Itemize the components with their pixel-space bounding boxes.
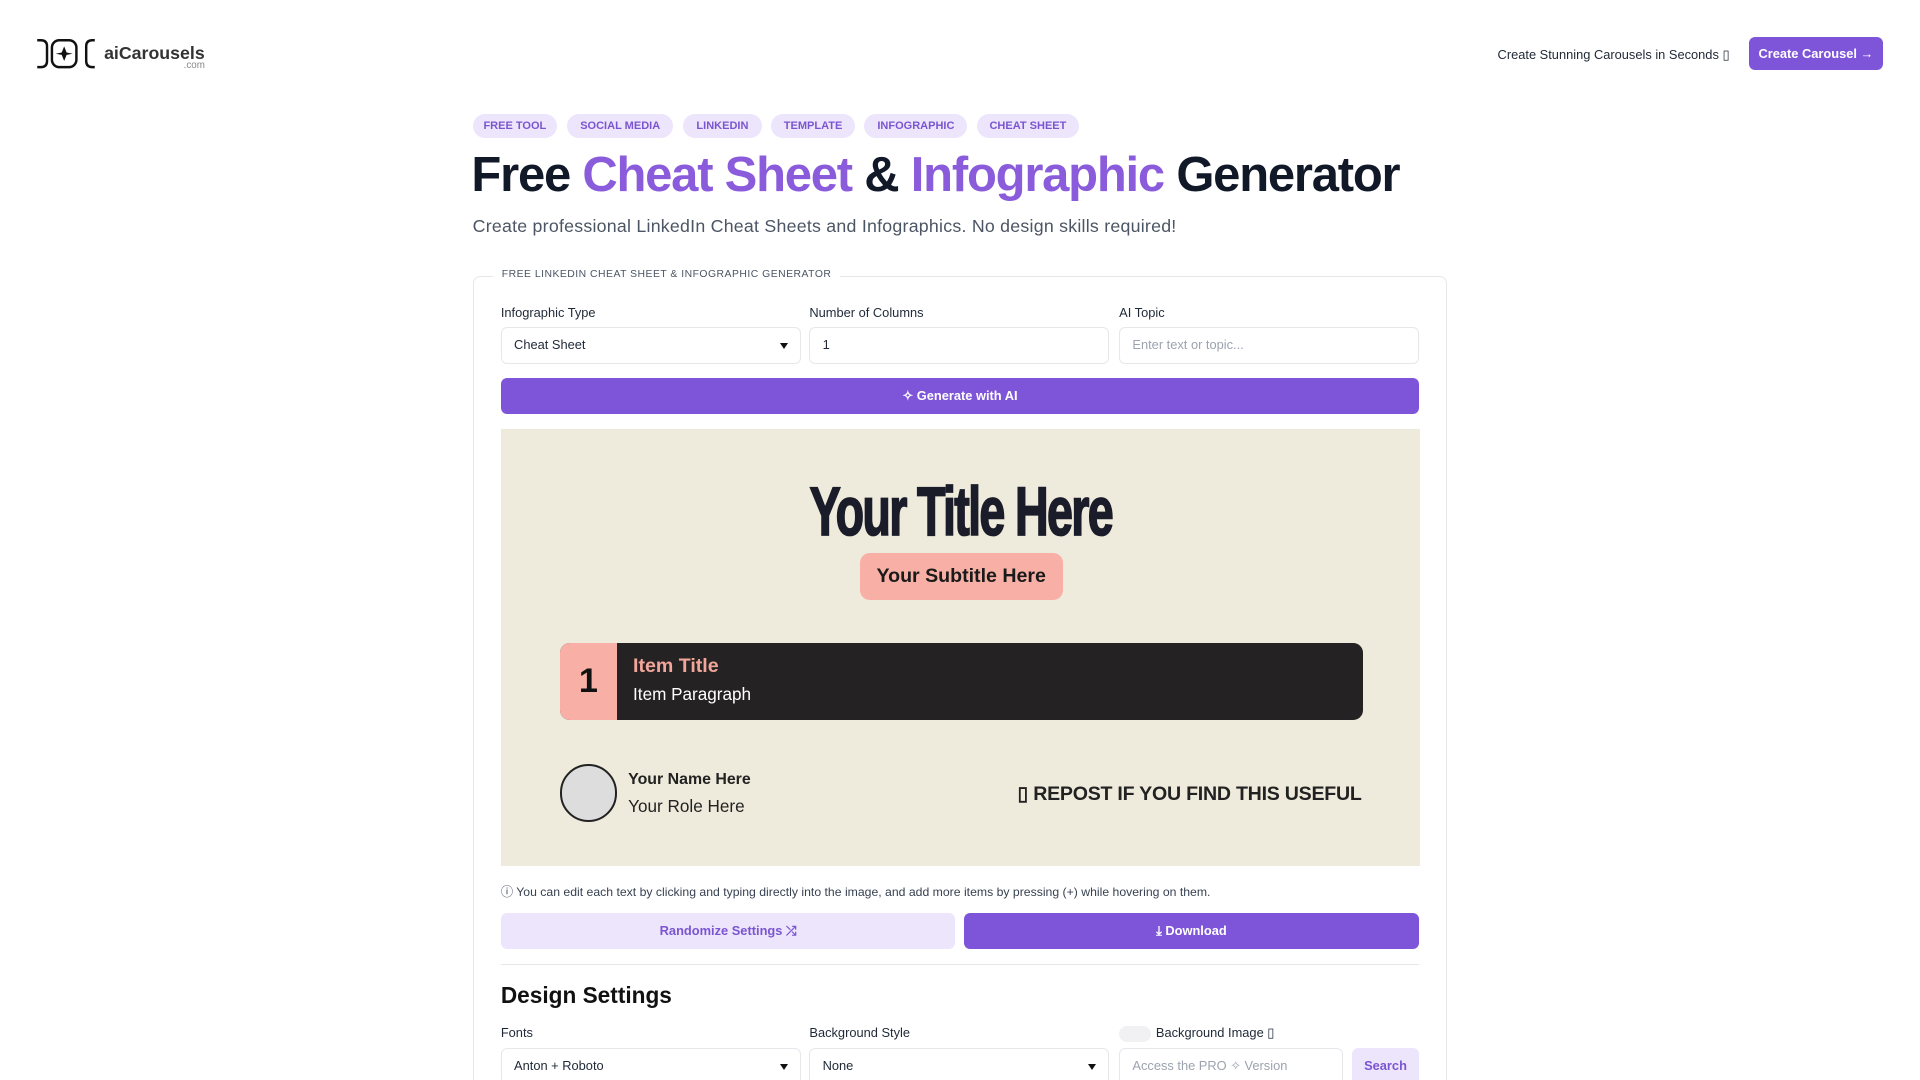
item row: Item Paragraph <box>633 684 751 704</box>
preview subtitle: Your Subtitle Here <box>877 565 1046 587</box>
design settings row: Background Image ▯ <box>1156 1025 1274 1040</box>
tags <box>473 114 1079 138</box>
design settings row <box>501 1025 1419 1080</box>
tags: INFOGRAPHIC <box>877 120 954 132</box>
info note: ⓘ You can edit each text by clicking and typing directly into the image, and add more items by pressing (+) while hovering on them. <box>501 885 1210 899</box>
form row: Cheat Sheet <box>514 337 585 352</box>
form row: Enter text or topic... <box>1132 337 1244 352</box>
tags: FREE TOOL <box>483 120 546 132</box>
repost callout: ▯ REPOST IF YOU FIND THIS USEFUL <box>1017 783 1362 805</box>
tags: TEMPLATE <box>784 120 842 132</box>
title: Free Cheat Sheet & Infographic Generator <box>471 148 1399 202</box>
download button <box>964 913 1419 949</box>
randomize button: Randomize Settings ⤮ <box>660 923 796 938</box>
tags: LINKEDIN <box>696 120 748 132</box>
design settings row: Background Style <box>809 1025 910 1040</box>
logo <box>37 39 205 71</box>
form row: 1 <box>823 337 830 352</box>
item row: 1 <box>579 662 598 700</box>
canvas: infographic preview <box>501 429 1420 866</box>
subtitle: Create professional LinkedIn Cheat Sheets and Infographics. No design skills required! <box>473 216 1176 236</box>
download button: ⤓ Download <box>1156 923 1227 938</box>
author: Your Name Here <box>628 771 751 788</box>
nav text: Create Stunning Carousels in Seconds ▯ <box>1498 47 1730 62</box>
author: Your Role Here <box>628 796 745 816</box>
tags: SOCIAL MEDIA <box>580 120 660 132</box>
item row: Item Title <box>633 655 719 677</box>
legend: FREE LINKEDIN CHEAT SHEET & INFOGRAPHIC GENERATOR <box>502 269 831 280</box>
nav button: Create Carousel → <box>1758 46 1873 61</box>
preview title: Your Title Here <box>809 473 1112 550</box>
design settings row: Search <box>1364 1058 1407 1073</box>
design settings row: Anton + Roboto <box>514 1058 604 1073</box>
randomize button <box>501 913 955 949</box>
form row: Number of Columns <box>809 305 924 320</box>
generate button: ✧ Generate with AI <box>902 388 1018 403</box>
design settings row: None <box>823 1058 853 1073</box>
preview subtitle <box>860 553 1063 600</box>
generate button <box>501 378 1419 414</box>
form row: AI Topic <box>1119 305 1165 320</box>
design settings row: Fonts <box>501 1025 533 1040</box>
logo: .com <box>184 60 205 71</box>
logo: aiCarousels <box>104 43 205 63</box>
nav button <box>1749 37 1883 70</box>
author <box>560 764 751 822</box>
tags: CHEAT SHEET <box>989 120 1066 132</box>
form row: Infographic Type <box>501 305 596 320</box>
form row <box>501 305 1419 364</box>
panel: generator <box>473 276 1447 1080</box>
design settings row: Access the PRO ✧ Version <box>1132 1058 1287 1073</box>
design settings heading: Design Settings <box>501 982 672 1008</box>
item row <box>560 643 1363 720</box>
